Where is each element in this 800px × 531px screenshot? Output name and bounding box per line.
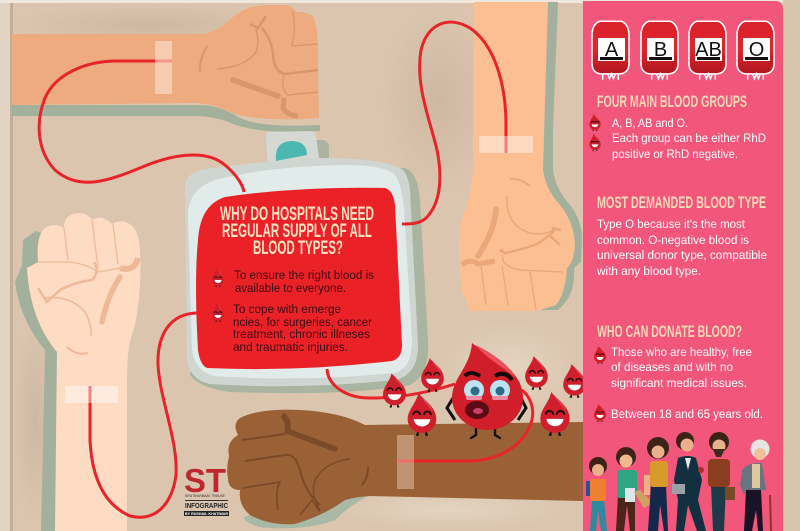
icon: blood bag A: [592, 21, 629, 80]
text: most demanded: Type O because it's the most: [597, 217, 746, 231]
text: four groups: [612, 116, 766, 161]
tape patches: [65, 41, 533, 489]
text: four groups: Each group can be either RhD: [612, 131, 766, 145]
icon: blood bag O: O: [749, 39, 764, 61]
icon: blood bag A: A: [605, 39, 619, 61]
arm shadows: [12, 2, 583, 531]
arm: left: [27, 213, 140, 531]
text: who can donate: [611, 345, 752, 390]
icon: bullet drops: [589, 114, 601, 151]
blood bag shadow and body: [185, 131, 428, 393]
icon: blood bag B: [641, 21, 678, 80]
arm: bottom: [227, 410, 583, 524]
person: man in suit: [672, 432, 706, 531]
panel: blood group facts: [583, 1, 783, 531]
arm: top: [12, 5, 319, 119]
logo: ST infographic: INFOGRAPHIC: [185, 501, 228, 510]
logo: ST infographic: BY RUSHAIL KHATIWAR: [185, 511, 228, 516]
bag hanger tab: [266, 131, 320, 168]
text: most demanded: [596, 217, 767, 278]
text: most demanded: with any blood type.: [596, 264, 701, 278]
bag heading: [220, 204, 374, 259]
bag red label: [196, 188, 402, 369]
small happy drops: [383, 356, 586, 435]
bag text: first reason: To ensure the right blood is: [234, 268, 374, 282]
bag text: second reason: and traumatic injuries.: [233, 340, 348, 354]
bag text: second reason: treatment, chronic illneses: [233, 327, 370, 341]
person: young man in mustard: [644, 437, 669, 531]
text: who can donate: of diseases and with no: [611, 360, 733, 374]
logo: ST infographic: NEW SHARMAAK TRIBUNE: [185, 493, 225, 498]
icon: blood bag AB: [689, 21, 726, 80]
bag text: second reason: To cope with emerge: [233, 302, 341, 316]
person: child: [586, 457, 607, 531]
arm: right: [459, 2, 575, 311]
bag text: first reason: available to everyone.: [235, 281, 346, 295]
bag text: second reason: [233, 302, 372, 354]
bag heading: WHY DO HOSPITALS NEED: [220, 204, 374, 225]
person: bearded man: [708, 432, 735, 531]
bag heading: BLOOD TYPES?: [253, 238, 343, 259]
person: elderly man: [740, 440, 771, 531]
text: four groups: A, B, AB and O.: [612, 116, 688, 130]
icon: blood bag B: B: [654, 39, 667, 61]
bag text: first reason: [234, 268, 374, 295]
logo: ST infographic: [184, 462, 229, 516]
text: four groups: positive or RhD negative.: [612, 147, 738, 161]
bag heading: REGULAR SUPPLY OF ALL: [222, 221, 372, 242]
text: who can donate: Those who are healthy, free: [611, 345, 752, 359]
person: student: [616, 447, 653, 531]
icon: bullet drop: [212, 269, 224, 286]
blood tubes: [39, 22, 533, 517]
icon: bullet drop: [594, 404, 606, 422]
icon: blood bag O: [737, 21, 774, 80]
icon: blood bag AB: AB: [695, 39, 722, 61]
people: donors group: [586, 432, 771, 531]
text: most demanded: common. O-negative blood is: [597, 233, 749, 247]
text: age range: Between 18 and 65 years old.: [611, 407, 763, 421]
bag text: second reason: ncies, for surgeries, cancer: [233, 315, 372, 329]
text: most demanded: universal donor type, compatible: [597, 248, 767, 262]
text: who can donate: significant medical issues.: [611, 376, 747, 390]
big drop character: [447, 343, 526, 438]
icon: bullet drop: [594, 346, 606, 364]
icon: bullet drop: [212, 304, 224, 322]
logo: ST infographic: ST: [184, 462, 226, 499]
